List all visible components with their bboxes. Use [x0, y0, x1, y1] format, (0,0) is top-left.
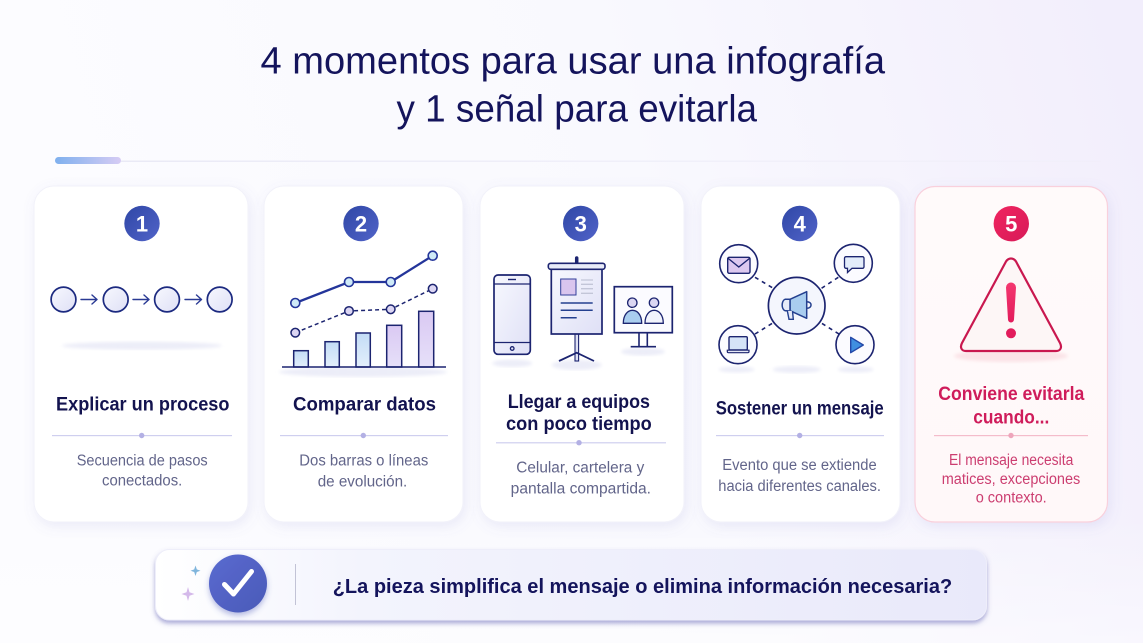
panel: sostener un mensaje: [701, 186, 900, 522]
title: y 1 señal para evitarla: [396, 88, 758, 130]
title accent rule: [55, 157, 1101, 164]
heading: cuando...: [973, 406, 1049, 428]
heading: con poco tiempo: [506, 413, 652, 435]
panel: explicar un proceso: [34, 186, 248, 522]
title: 4 momentos para usar una infografía: [260, 40, 886, 82]
badge 4: 4: [794, 212, 807, 236]
heading: Explicar un proceso: [56, 394, 230, 416]
heading: [506, 391, 652, 435]
description: [718, 457, 881, 495]
badge 3: [563, 206, 598, 241]
description: [511, 460, 651, 498]
divider: [496, 440, 666, 445]
icon: sparkles: [182, 566, 200, 601]
icon: check badge: [209, 554, 267, 612]
badge 3: 3: [575, 212, 587, 236]
panel: llegar a equipos: [480, 186, 684, 522]
icon: billboard: [548, 258, 605, 370]
description: Dos barras o líneas: [299, 452, 429, 470]
icon: warning triangle: [954, 258, 1068, 362]
description: [942, 452, 1081, 507]
panel: comparar datos: [264, 186, 463, 522]
badge 2: 2: [355, 212, 367, 236]
badge 5: [994, 206, 1029, 241]
heading: Comparar datos: [293, 394, 436, 416]
divider: [934, 433, 1088, 438]
divider: [52, 433, 232, 438]
description: El mensaje necesita: [949, 452, 1074, 469]
heading: Sostener un mensaje: [716, 397, 884, 419]
panel: conviene evitarla: [915, 186, 1108, 522]
divider: [716, 433, 884, 438]
question text: ¿La pieza simplifica el mensaje o elimina información necesaria?: [333, 575, 952, 598]
description: Celular, cartelera y: [516, 460, 645, 476]
badge 4: [782, 206, 817, 241]
chart: bars and lines: [279, 251, 447, 377]
heading: Conviene evitarla: [938, 383, 1084, 405]
description: Evento que se extiende: [722, 457, 877, 474]
badge 1: 1: [136, 212, 148, 236]
badge 5: 5: [1005, 212, 1017, 237]
divider: [280, 433, 448, 438]
description: pantalla compartida.: [511, 480, 651, 498]
divider: [295, 564, 296, 605]
badge 1: [124, 206, 160, 241]
description: hacia diferentes canales.: [718, 478, 881, 495]
description: Secuencia de pasos: [77, 452, 208, 470]
description: [77, 452, 208, 490]
icon: channels network: [719, 244, 874, 373]
description: de evolución.: [318, 474, 407, 490]
description: conectados.: [102, 472, 182, 490]
callout: key question: [156, 550, 986, 620]
icon: shared screen: [614, 287, 672, 356]
heading: Llegar a equipos: [508, 391, 650, 413]
heading: [938, 383, 1084, 428]
title: [260, 40, 886, 130]
icon: process sequence: [51, 287, 232, 350]
badge 2: [343, 206, 379, 241]
icon: phone: [492, 275, 532, 367]
description: matices, excepciones: [942, 471, 1081, 488]
description: [299, 452, 429, 490]
description: o contexto.: [976, 490, 1047, 507]
